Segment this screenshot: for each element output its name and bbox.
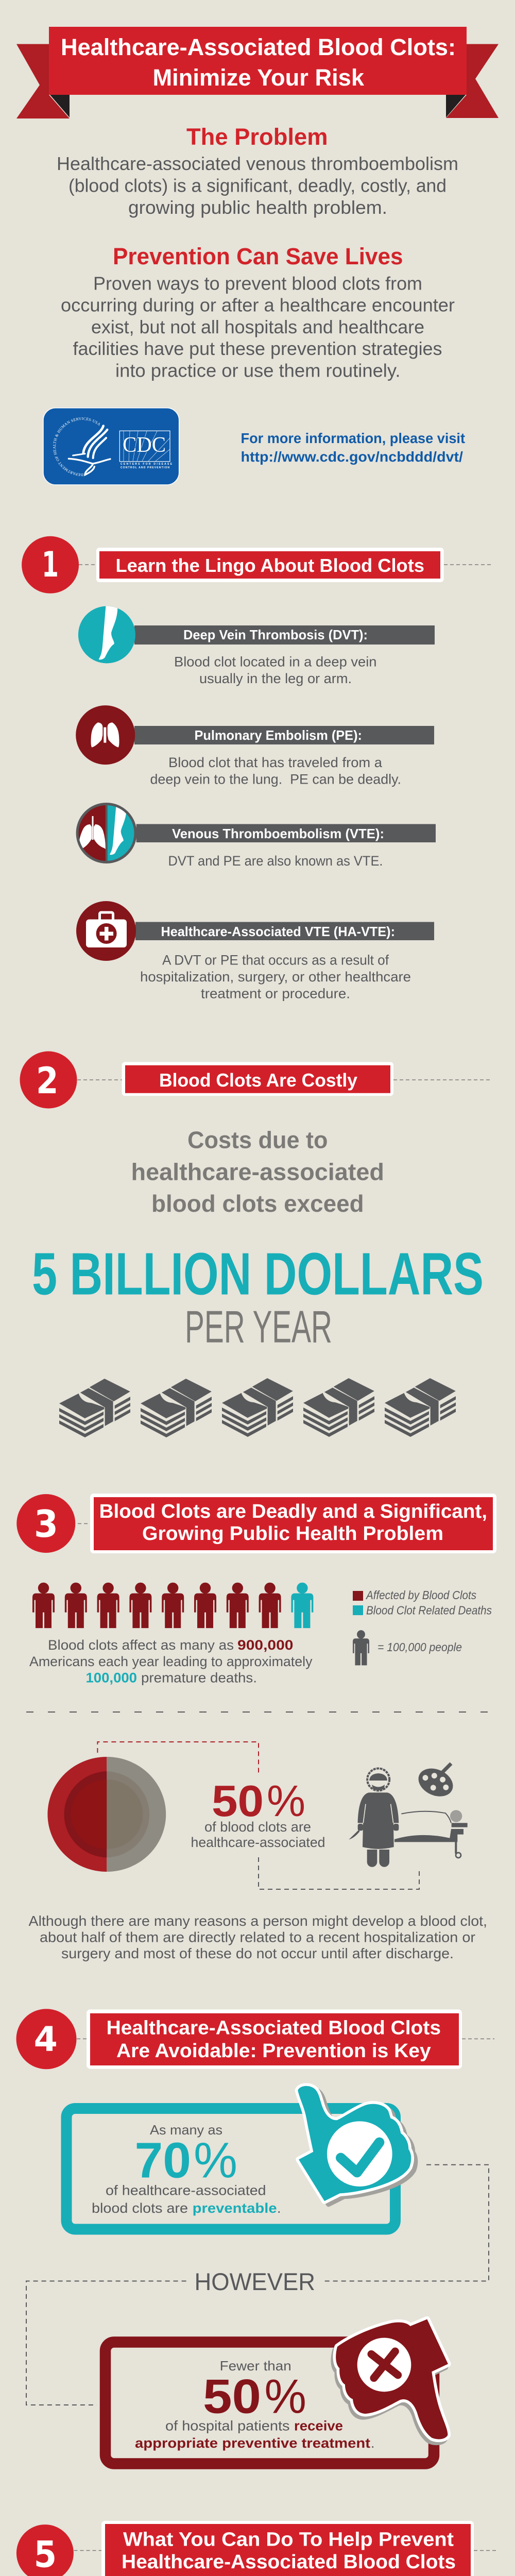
panel: fewer than 50 percent: Fewer than (220, 2358, 291, 2374)
panel: 70 percent preventable: % (194, 2132, 237, 2189)
section 3 header: Blood Clots are Deadly and a Significant, (99, 1501, 487, 1522)
section 4 header: Are Avoidable: Prevention is Key (116, 2040, 431, 2062)
logo: HHS and CDC: CDC (123, 433, 166, 457)
section 3 header: Growing Public Health Problem (142, 1523, 443, 1545)
text: however: HOWEVER (195, 2268, 315, 2295)
section 1 header: Learn the Lingo About Blood Clots (115, 555, 424, 576)
text: costs due to (131, 1126, 384, 1217)
text: problem body: Healthcare-associated venous thromboembolism (57, 153, 458, 174)
text: more information link: http://www.cdc.gov/ncbddd/dvt/ (241, 449, 463, 465)
text: 900,000 affected (29, 1637, 313, 1686)
panel: fewer than 50 percent: receive (294, 2418, 343, 2433)
icon: surgeon and patient (349, 1763, 468, 1867)
section 3 header (16, 1494, 496, 1553)
section 5 header: Healthcare-Associated Blood Clots (122, 2551, 456, 2573)
section 4 header: Healthcare-Associated Blood Clots (107, 2018, 441, 2039)
panel: PE definition (76, 705, 434, 787)
text: 900,000 affected: 900,000 (237, 1637, 294, 1653)
icon: money stack 4 (303, 1378, 374, 1437)
panel: VTE definition: DVT and PE are also known as VTE. (168, 853, 383, 869)
text: prevention body: Proven ways to prevent blood clots from (93, 273, 422, 294)
text: 900,000 affected: Blood clots affect as many as (48, 1637, 234, 1653)
text: problem body: growing public health problem. (128, 197, 387, 218)
chart: 50 percent circle (47, 1757, 166, 1872)
stat: 50 percent healthcare-associated (191, 1777, 325, 1850)
panel: 70 percent preventable: preventable (193, 2200, 277, 2216)
logo: HHS and CDC: CENTERS FOR DISEASE (121, 463, 173, 466)
text: costs due to: Costs due to (187, 1126, 328, 1153)
logo: HHS and CDC (43, 408, 179, 485)
icon: money stack 2 (141, 1379, 212, 1437)
text: more information link: For more information, please visit (241, 430, 465, 446)
text: problem body: (blood clots) is a significant, deadly, costly, and (68, 175, 447, 196)
text: prevention body: facilities have put these prevention strategies (73, 338, 442, 359)
panel: fewer than 50 percent: % (264, 2369, 306, 2423)
section 1 header: 1 (42, 545, 59, 585)
text: prevention body: into practice or use them routinely. (115, 360, 401, 381)
stat: 50 percent healthcare-associated: healthcare-associated (191, 1835, 325, 1850)
pictogram: nine people (32, 1583, 313, 1628)
text: prevention body: occurring during or after a healthcare encounter (61, 295, 455, 316)
panel: DVT definition (78, 604, 435, 686)
section 1 header (22, 536, 493, 594)
panel: VTE definition (77, 804, 436, 869)
panel: 70 percent preventable: blood clots are (92, 2200, 188, 2216)
heading: prevention can save lives: Prevention Can Save Lives (113, 243, 403, 269)
text: per year: PER YEAR (185, 1301, 332, 1352)
panel: 70 percent preventable: of healthcare-associated (106, 2183, 266, 2198)
panel: fewer than 50 percent (105, 2319, 448, 2464)
section 2 header: Blood Clots Are Costly (159, 1070, 357, 1091)
legend: Affected by Blood Clots (365, 1588, 476, 1602)
panel: fewer than 50 percent: appropriate preventive treatment (135, 2435, 370, 2451)
icon: thumbs down with x (333, 2319, 448, 2443)
section 3 header: 3 (34, 1502, 58, 1546)
icon: thumbs up with check (298, 2086, 415, 2204)
panel: HA-VTE definition: treatment or procedure. (201, 986, 350, 1002)
icon: first aid kit (76, 901, 136, 961)
logo: HHS and CDC: CONTROL AND PREVENTION (121, 466, 169, 469)
panel: VTE definition: Venous Thromboembolism (VTE): (172, 826, 384, 841)
text: problem body (57, 153, 458, 218)
text: costs due to: healthcare-associated (131, 1158, 384, 1185)
panel: PE definition: deep vein to the lung. PE can be deadly. (150, 772, 401, 787)
text: half related to hospitalization: Although there are many reasons a person might develop a blood clot, (29, 1913, 487, 1929)
text: half related to hospitalization: surgery and most of these do not occur until after discharge. (61, 1945, 454, 1961)
text: half related to hospitalization: about half of them are directly related to a recent hospitalization or (40, 1929, 475, 1945)
section 5 header: What You Can Do To Help Prevent (123, 2529, 454, 2551)
section 4 header (16, 2009, 494, 2069)
panel: DVT definition: Blood clot located in a deep vein (174, 654, 377, 669)
panel: HA-VTE definition: A DVT or PE that occurs as a result of (162, 952, 389, 968)
heading: the problem: The Problem (186, 124, 328, 150)
stat: 50 percent healthcare-associated: % (267, 1777, 305, 1826)
stat: 50 percent healthcare-associated: 50 (212, 1777, 264, 1826)
section 2 header (20, 1051, 492, 1109)
section 4 header: 4 (34, 2020, 58, 2059)
panel: 70 percent preventable: As many as (150, 2122, 222, 2138)
text: prevention body (61, 273, 455, 381)
icon: lungs and leg (77, 804, 135, 862)
panel: DVT definition: Deep Vein Thrombosis (DVT): (183, 627, 368, 642)
title banner: Healthcare-Associated Blood Clots: (61, 34, 456, 60)
panel: fewer than 50 percent: of hospital patients (165, 2418, 289, 2433)
icons: money stacks (59, 1378, 456, 1437)
title banner: Minimize Your Risk (152, 64, 365, 91)
panel: HA-VTE definition: Healthcare-Associated VTE (HA-VTE): (161, 924, 395, 939)
panel: 70 percent preventable (66, 2086, 415, 2229)
section 5 header (16, 2521, 497, 2576)
text: half related to hospitalization (29, 1913, 487, 1961)
panel: PE definition: Pulmonary Embolism (PE): (195, 727, 362, 743)
panel: 70 percent preventable: . (277, 2200, 281, 2216)
text: prevention body: exist, but not all hospitals and healthcare (91, 316, 424, 337)
legend (353, 1588, 492, 1665)
legend: = 100,000 people (377, 1640, 462, 1654)
panel: PE definition: Blood clot that has traveled from a (168, 755, 383, 770)
icon: money stack 5 (385, 1378, 456, 1437)
text: 900,000 affected: Americans each year leading to approximately (29, 1654, 313, 1669)
text: 900,000 affected: 100,000 (85, 1670, 137, 1686)
panel: 70 percent preventable: 70 (135, 2132, 191, 2189)
panel: HA-VTE definition (76, 901, 434, 1002)
section 2 header: 2 (36, 1060, 59, 1102)
panel: DVT definition: usually in the leg or arm. (199, 671, 352, 686)
panel: HA-VTE definition: hospitalization, surgery, or other healthcare (140, 969, 411, 985)
text: costs due to: blood clots exceed (151, 1190, 364, 1217)
icon: lungs (76, 705, 135, 765)
icon: money stack 3 (222, 1378, 293, 1437)
title banner (16, 27, 499, 118)
stat: 50 percent healthcare-associated: of blood clots are (204, 1819, 311, 1835)
section 5 header: 5 (34, 2534, 57, 2576)
legend: Blood Clot Related Deaths (366, 1604, 492, 1617)
icon: leg (78, 604, 135, 664)
text: 900,000 affected: premature deaths. (141, 1670, 257, 1686)
panel: fewer than 50 percent: . (371, 2435, 375, 2451)
icon: money stack 1 (59, 1379, 130, 1437)
panel: fewer than 50 percent: 50 (203, 2369, 261, 2423)
logo: HHS and CDC: DEPARTMENT OF HEALTH & HUMAN SERVICES·USA (53, 417, 100, 476)
text: more information link (241, 430, 465, 465)
